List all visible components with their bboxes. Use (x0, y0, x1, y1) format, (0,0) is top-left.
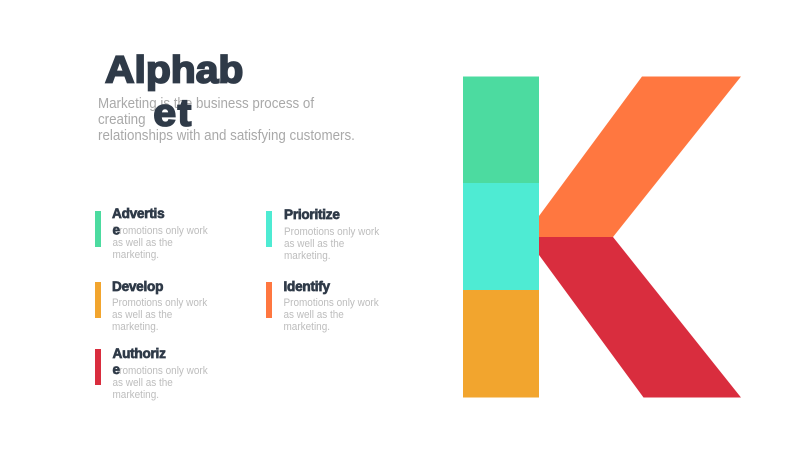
body: Authorize: as well as the (112, 376, 173, 389)
body: Prioritize: as well as the (284, 237, 344, 250)
body: Identify: marketing. (284, 320, 330, 333)
item: Develop (95, 279, 208, 333)
body: Prioritize: Promotions only work (284, 225, 380, 238)
K stem: green block (463, 76, 539, 184)
body: Authorize: Promotions only work (112, 364, 208, 377)
item: Identify (266, 279, 379, 333)
title: Alphab (105, 49, 243, 91)
body: Advertise (112, 224, 208, 261)
heading: Identify: Identify (284, 279, 331, 294)
body: Develop (112, 296, 208, 333)
subtitle: relationships with and satisfying customers. (98, 127, 355, 143)
body: Prioritize: marketing. (284, 249, 331, 262)
item: Advertise (95, 206, 208, 261)
body: Develop: as well as the (112, 308, 172, 321)
bar: Advertise (95, 211, 101, 247)
bar: Prioritize (266, 211, 272, 247)
K lower arm: red (539, 237, 741, 398)
heading: Authorize: Authoriz (112, 346, 166, 361)
title (105, 49, 243, 134)
K stem: amber block (463, 290, 539, 398)
heading: Authorize: e (112, 362, 120, 377)
body: Advertise: as well as the (112, 236, 173, 249)
subtitle: creating (98, 111, 146, 127)
body: Develop: Promotions only work (112, 296, 208, 309)
letter K graphic (463, 76, 741, 398)
subtitle: Marketing is the business process of (98, 95, 314, 111)
heading: Prioritize: Prioritize (284, 207, 340, 222)
heading: Advertise (112, 206, 164, 238)
body: Develop: marketing. (112, 320, 159, 333)
bar: Develop (95, 282, 101, 318)
heading: Develop: Develop (112, 279, 163, 294)
body: Authorize: marketing. (112, 388, 159, 401)
heading: Authorize (112, 346, 166, 377)
body: Identify: Promotions only work (284, 296, 379, 309)
item: Prioritize (266, 207, 380, 262)
body: Authorize (112, 364, 208, 401)
body: Identify: as well as the (284, 308, 344, 321)
body: Advertise: Promotions only work (112, 224, 208, 237)
K stem: turquoise block (463, 183, 539, 290)
item: Authorize (95, 346, 208, 401)
body: Identify (284, 296, 379, 333)
subtitle (98, 95, 355, 143)
heading: Advertise: e (112, 222, 120, 238)
bar: Authorize (95, 349, 101, 385)
body: Prioritize (284, 225, 380, 262)
heading: Advertise: Advertis (112, 206, 164, 221)
bar: Identify (266, 282, 272, 318)
K upper arm: orange (539, 76, 741, 237)
title: et (153, 92, 193, 134)
body: Advertise: marketing. (112, 248, 159, 261)
